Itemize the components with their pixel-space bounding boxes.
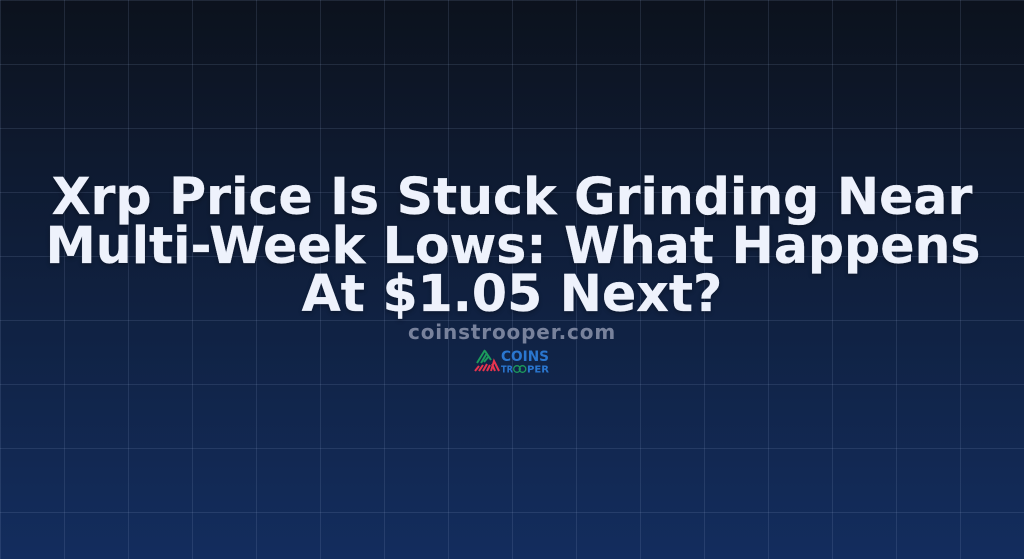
- title: Xrp Price Is Stuck Grinding Near: [52, 167, 972, 226]
- wordmark: coins: COINS: [501, 349, 549, 365]
- icon: red stripes: [475, 361, 499, 371]
- icon: green peak: [477, 350, 491, 363]
- title: [46, 167, 980, 323]
- title: At $1.05 Next?: [302, 264, 722, 323]
- logo: coins trooper: [474, 349, 550, 375]
- wordmark: trooper: [501, 364, 550, 376]
- website url: coinstrooper.com: [408, 320, 616, 344]
- title: Multi-Week Lows: What Happens: [46, 216, 980, 274]
